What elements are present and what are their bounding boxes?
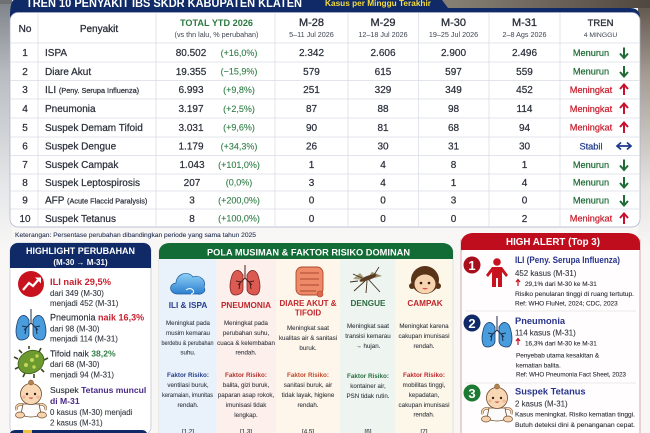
row 8 xyxy=(22,177,628,189)
footnote: Keterangan: Persentase perubahan dibandingkan periode yang sama tahun 2025 xyxy=(15,232,257,239)
pneumonia highlight text xyxy=(50,312,144,344)
pneumonia highlight text: menjadi 114 (M-31) xyxy=(50,334,118,344)
row 8: 4 xyxy=(522,178,528,189)
tetanus highlight text: di M-31 xyxy=(50,396,80,406)
row 1: ISPA xyxy=(45,48,67,59)
row 7: 1 xyxy=(309,160,315,171)
row 5 xyxy=(22,122,628,134)
alert 3 text: Butuh deteksi dini & penanganan cepat. xyxy=(515,422,635,429)
panel: disease table xyxy=(10,12,640,227)
table header: 5–11 Jul 2026 xyxy=(289,30,334,39)
row 8: 207 xyxy=(184,178,201,189)
table header: 4 MINGGU xyxy=(584,32,617,39)
table header: 2–8 Ags 2026 xyxy=(503,30,546,39)
row 1: Menurun xyxy=(573,48,609,58)
row 9: 3 xyxy=(451,196,457,206)
column: campak xyxy=(399,266,449,433)
row 8: 8 xyxy=(22,178,28,189)
alert 3 text: Kasus meningkat. Risiko kematian tinggi. xyxy=(515,412,635,418)
icon: person xyxy=(486,258,508,287)
alert 2 text: Ref: WHO Pneumonia Fact Sheet, 2023 xyxy=(516,372,626,378)
column: pneumonia: lengkap. xyxy=(234,412,258,419)
row 2: 2 xyxy=(22,67,28,78)
column: ILI ISPA: keramaian, imunitas xyxy=(162,392,213,399)
row 5: 81 xyxy=(377,123,389,134)
icon: mosquito xyxy=(350,267,382,293)
row 7: Menurun xyxy=(573,160,609,170)
row 9: 3 xyxy=(189,196,195,206)
icon: baby alert xyxy=(482,384,512,422)
row 6: 26 xyxy=(306,142,317,152)
alert 1 text: Risiko penularan tinggi di ruang tertutup. xyxy=(515,291,634,298)
column backgrounds xyxy=(160,259,452,433)
column: campak: Faktor Risiko: xyxy=(403,372,445,379)
pneumonia highlight text: Pneumonia naik 16,3% xyxy=(50,312,144,322)
column: diare: DIARE AKUT & xyxy=(279,299,337,308)
row 3: 3 xyxy=(22,85,28,96)
icon: girl face xyxy=(409,266,441,294)
row 2 xyxy=(22,66,628,78)
row 1 xyxy=(22,48,628,59)
row 7: (+101,0%) xyxy=(218,160,260,170)
row 6: Stabil xyxy=(580,141,602,151)
column: diare: tidak layak, higiene xyxy=(282,392,335,399)
row 3: 329 xyxy=(375,85,392,96)
alert 3 text xyxy=(515,386,635,429)
row 5: Meningkat xyxy=(570,123,613,133)
row 5: Suspek Demam Tifoid xyxy=(45,123,143,134)
tifoid highlight text: dari 68 (M-30) xyxy=(50,360,100,369)
column: pneumonia: perubahan suhu, xyxy=(223,330,269,337)
row 2: Menurun xyxy=(573,67,609,77)
row 8: Suspek Leptospirosis xyxy=(45,178,140,189)
table header: M-29 xyxy=(370,17,396,29)
alert header xyxy=(461,233,640,250)
column: dengue: Meningkat saat xyxy=(347,323,389,330)
column: pneumonia xyxy=(217,265,275,433)
row 10: 0 xyxy=(380,214,386,225)
row 2: (−15,9%) xyxy=(221,67,257,77)
row 9: (+200,0%) xyxy=(218,195,260,205)
row 3 xyxy=(22,84,628,96)
row 7: 1.043 xyxy=(179,160,205,171)
icon: lungs xyxy=(16,309,46,340)
alert 2 text xyxy=(515,316,626,378)
row 2: 579 xyxy=(303,67,320,78)
table header: M-31 xyxy=(512,17,537,29)
row 3: 251 xyxy=(303,85,320,96)
column: diare: buruk. xyxy=(299,345,317,352)
table header: (vs thn lalu, % perubahan) xyxy=(175,30,258,39)
alert 2 text: Pneumonia xyxy=(515,316,566,326)
table header: 12–18 Jul 2026 xyxy=(358,30,408,39)
highlight header: HIGHLIGHT PERUBAHAN xyxy=(26,246,135,257)
column: pneumonia: paparan asap rokok, xyxy=(218,392,274,399)
row 6: (+34,3%) xyxy=(221,141,257,151)
row 1: 2.496 xyxy=(512,48,537,59)
column: ILI ISPA: rendah. xyxy=(178,402,199,409)
row 4: 88 xyxy=(377,104,389,115)
title bar xyxy=(10,0,640,18)
row 6 xyxy=(22,141,631,152)
column: dengue: transisi kemarau xyxy=(345,333,391,340)
row 10 xyxy=(19,214,628,225)
column: diare: rendah. xyxy=(298,402,319,409)
row 3: (+9,8%) xyxy=(223,85,255,95)
pola header xyxy=(159,243,453,259)
row 9: 0 xyxy=(522,196,528,206)
row 5: 90 xyxy=(306,123,317,134)
icon: cloud xyxy=(171,273,205,294)
row 1: 2.606 xyxy=(370,48,396,59)
column: campak: kepadatan, xyxy=(409,392,440,399)
tetanus highlight text: 2 kasus (M-31) xyxy=(50,418,103,428)
column: diare xyxy=(279,267,337,433)
tifoid highlight text: Tifoid naik 38,2% xyxy=(50,348,116,358)
photo background strips xyxy=(0,0,650,250)
column: ILI ISPA: suhu. xyxy=(180,350,196,356)
row 7: 4 xyxy=(380,160,386,171)
column: campak: Meningkat karena xyxy=(399,323,449,330)
row 8: 4 xyxy=(380,178,386,189)
column: pneumonia: imunisasi tidak xyxy=(226,402,267,409)
row 8: (0,0%) xyxy=(226,178,252,188)
row 8: 1 xyxy=(451,178,457,189)
row 10: 10 xyxy=(19,214,31,225)
column: ILI ISPA xyxy=(162,273,214,433)
pola header: POLA MUSIMAN & FAKTOR RISIKO DOMINAN xyxy=(207,248,410,258)
row 1: 80.502 xyxy=(176,48,207,59)
table header: Penyakit xyxy=(80,24,118,35)
row 5: 68 xyxy=(448,123,459,134)
row 4: 114 xyxy=(517,104,533,115)
column: ILI ISPA: musim kemarau xyxy=(166,330,211,337)
row 6: 6 xyxy=(22,142,28,152)
row 9 xyxy=(22,195,628,206)
row 7 xyxy=(22,160,628,171)
row 1: 2.342 xyxy=(299,48,324,59)
row 5: 5 xyxy=(22,123,28,134)
row 8: Menurun xyxy=(573,178,609,188)
highlight header xyxy=(10,243,151,268)
column: diare: Meningkat saat xyxy=(287,325,329,332)
alert 1 text: 29,1% dari M-30 ke M-31 xyxy=(525,281,597,288)
column: pneumonia: Faktor Risiko: xyxy=(225,372,267,379)
row 10: Meningkat xyxy=(570,214,613,224)
pneumonia highlight text: dari 98 (M-30) xyxy=(50,324,100,334)
tetanus highlight text: Suspek Tetanus muncul xyxy=(50,385,146,395)
row 4: Pneumonia xyxy=(45,104,96,115)
icon: rising chart xyxy=(18,271,44,297)
alert 1 text: 452 kasus (M-31) xyxy=(515,269,577,278)
column: ILI ISPA: Faktor Risiko: xyxy=(167,372,209,379)
column: diare: TIFOID xyxy=(295,308,321,318)
table header xyxy=(19,17,617,39)
row 9: Menurun xyxy=(573,195,609,205)
alert 1 text: ILI (Peny. Serupa Influenza) xyxy=(515,255,620,265)
row 6: 30 xyxy=(519,142,530,152)
row 3: ILI (Peny. Serupa Influenza) xyxy=(45,85,139,96)
row 4: 87 xyxy=(306,104,317,115)
bottom bar xyxy=(10,430,147,433)
row 9: 0 xyxy=(309,196,315,206)
alert 2 badge xyxy=(464,314,480,332)
alert 3 badge: 3 xyxy=(468,386,476,401)
column: campak: rendah. xyxy=(414,412,435,418)
row 4 xyxy=(22,104,628,115)
alert 3 text: 2 kasus (M-31) xyxy=(515,400,568,408)
row 9: 9 xyxy=(22,196,28,206)
alert 2 text: 16,3% dari M-30 ke M-31 xyxy=(525,340,597,348)
table header: 19–25 Jul 2026 xyxy=(429,30,478,39)
row 7: 7 xyxy=(22,160,28,171)
column: pneumonia: PNEUMONIA xyxy=(221,301,271,310)
row 3: 6.993 xyxy=(178,85,204,96)
column: dengue xyxy=(345,267,391,433)
column: dengue: Faktor Risiko: xyxy=(347,373,389,380)
column: dengue: → hujan. xyxy=(356,343,381,350)
column: campak: cakupan imunisasi xyxy=(399,333,449,340)
column: pneumonia: balita, gizi buruk, xyxy=(223,382,269,389)
icon: lungs blue xyxy=(482,316,512,347)
icon: red lungs xyxy=(230,265,260,295)
row 9: AFP (Acute Flaccid Paralysis) xyxy=(45,196,147,206)
row 2: 597 xyxy=(445,67,462,78)
row 1: (+16,0%) xyxy=(221,48,257,58)
column: campak: CAMPAK xyxy=(407,299,443,308)
column: campak: rendah. xyxy=(414,343,435,350)
row 6: 30 xyxy=(377,142,389,152)
row 6: 1.179 xyxy=(178,142,204,152)
column: ILI ISPA: berdebu & perubahan xyxy=(162,340,214,347)
row 4: 4 xyxy=(22,104,28,115)
table header: TREN xyxy=(588,18,614,29)
table header: No xyxy=(19,24,32,35)
table header: TOTAL YTD 2026 xyxy=(180,18,253,29)
column: ILI ISPA: Meningkat pada xyxy=(166,320,211,327)
row 1: 1 xyxy=(22,48,28,59)
panel: highlight perubahan xyxy=(10,243,151,433)
row 3: 452 xyxy=(516,85,533,96)
tetanus highlight text: 0 kasus (M-30) menjadi xyxy=(50,408,133,417)
alert 3 badge xyxy=(464,384,480,402)
row 7: 8 xyxy=(451,160,457,171)
tifoid highlight text xyxy=(50,348,116,380)
alert 2 badge: 2 xyxy=(468,316,476,331)
alert 3 text: Suspek Tetanus xyxy=(515,386,586,396)
table header: M-28 xyxy=(299,17,324,29)
column: ILI ISPA: ILI & ISPA xyxy=(169,301,207,310)
tetanus highlight text xyxy=(50,385,146,428)
alert 2 text: kematian balita. xyxy=(516,362,561,370)
alert 1 badge xyxy=(464,256,480,274)
column: dengue: DENGUE xyxy=(350,299,386,308)
column: campak: cakupan imunisasi xyxy=(399,402,449,409)
table header: M-30 xyxy=(441,17,466,29)
row 10: 8 xyxy=(189,214,195,225)
icon: bacteria xyxy=(14,346,48,378)
panel: high alert xyxy=(461,233,640,433)
tifoid highlight text: menjadi 94 (M-31) xyxy=(50,370,114,380)
row 10: 2 xyxy=(522,214,528,225)
alert 2 text: 114 kasus (M-31) xyxy=(515,328,576,338)
ILI highlight text: ILI naik 29,5% xyxy=(50,277,112,287)
row 10: (+100,0%) xyxy=(218,214,260,224)
ILI highlight text: menjadi 452 (M-31) xyxy=(50,299,119,308)
row 4: 3.197 xyxy=(178,104,204,115)
row 6: Suspek Dengue xyxy=(45,142,117,152)
row 4: 98 xyxy=(448,104,459,115)
row 5: (+9,6%) xyxy=(223,123,255,133)
alert header: HIGH ALERT (Top 3) xyxy=(506,237,600,248)
alert 1 badge: 1 xyxy=(468,258,476,273)
column: diare: sanitasi buruk, air xyxy=(284,382,332,389)
row 4: Meningkat xyxy=(570,104,613,114)
row 3: 349 xyxy=(445,85,462,96)
row 2: 19.355 xyxy=(176,67,207,78)
row 10: 0 xyxy=(451,214,457,225)
row 3: Meningkat xyxy=(570,85,613,95)
row 6: 31 xyxy=(448,142,459,152)
column: pneumonia: cuaca & kelembaban xyxy=(217,340,275,347)
column: diare: Faktor Risiko: xyxy=(287,372,329,379)
row 5: 3.031 xyxy=(178,123,204,134)
column: dengue: kontainer air, xyxy=(350,383,386,390)
row 2: 559 xyxy=(516,67,533,78)
column: pneumonia: Meningkat pada xyxy=(224,320,269,327)
panel: pola musiman xyxy=(159,243,453,433)
column: campak: mobilitas tinggi, xyxy=(403,382,446,389)
row 10: 0 xyxy=(309,214,315,225)
row 4: (+2,5%) xyxy=(223,104,255,114)
row 8: 3 xyxy=(309,178,315,189)
row 7: Suspek Campak xyxy=(45,160,119,171)
alert 1 text xyxy=(515,255,634,308)
alert 1 text: Ref: WHO FluNet, 2024; CDC, 2023 xyxy=(515,300,618,308)
column: dengue: PSN tidak rutin. xyxy=(346,393,390,400)
row 2: Diare Akut xyxy=(45,67,91,78)
ILI highlight text xyxy=(50,277,119,308)
column: pneumonia: rendah. xyxy=(236,350,257,356)
icon: baby xyxy=(16,380,46,418)
alert 2 text: Penyebab utama kesakitan & xyxy=(516,352,600,360)
row 2: 615 xyxy=(375,67,392,78)
highlight header: (M-30 → M-31) xyxy=(53,258,108,267)
row 9: 0 xyxy=(380,196,386,206)
ILI highlight text: dari 349 (M-30) xyxy=(50,289,104,298)
row 1: 2.900 xyxy=(441,48,466,59)
column: diare: kualitas air & sanitasi xyxy=(279,335,337,342)
row 10: Suspek Tetanus xyxy=(45,214,116,225)
row 5: 94 xyxy=(519,123,530,134)
row 7: 1 xyxy=(522,160,528,171)
icon: intestine xyxy=(296,267,323,297)
column: ILI ISPA: ventilasi buruk, xyxy=(167,382,209,389)
